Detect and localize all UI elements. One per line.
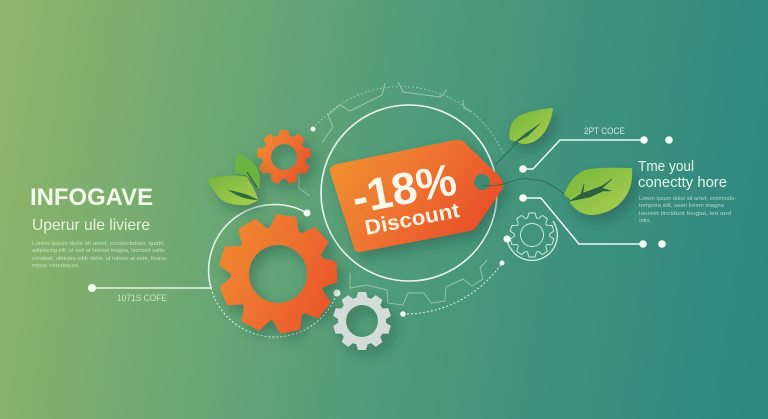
discount tag (330, 140, 570, 252)
tag eyelet (474, 174, 490, 190)
icon: top leaf (495, 108, 553, 165)
body paragraph: Lorem ipsum dolor sit amet, consectetuer, quidit, (32, 241, 165, 247)
right paragraph: odio. (639, 218, 651, 224)
icon: outline gear (503, 213, 557, 260)
body paragraph (32, 241, 168, 269)
left text block (30, 184, 168, 269)
label top: 2PT COCE (584, 126, 625, 136)
title: INFOGAVE (30, 184, 153, 211)
right paragraph: laoreet tincidunt feugiat, leo and (639, 211, 731, 217)
right text block: conectty hore (638, 174, 727, 191)
discount value: -18% (348, 153, 460, 224)
background gear outline and dotted ring (299, 82, 503, 305)
central ring (321, 105, 497, 281)
ring around main gear (209, 126, 340, 337)
discount label: Discount (363, 199, 462, 240)
right connector: top (519, 126, 673, 173)
grey gear (333, 292, 398, 358)
right connector: bottom (519, 194, 666, 248)
body paragraph: mpus consequat. (32, 263, 80, 269)
icon: leaves left (207, 153, 260, 205)
small orange gear (256, 130, 318, 192)
icon: right leaf (564, 168, 632, 215)
subtitle: Uperur ule liviere (32, 217, 150, 234)
left connector with label: 1071S COFE (117, 293, 167, 303)
body paragraph: volutpat, ultricies nibh dolor, ut labore at sem, tourre- (32, 256, 168, 262)
left connector with label (88, 284, 212, 303)
right heading: Tme youl (638, 159, 694, 175)
right paragraph (639, 196, 736, 224)
tag string (482, 179, 570, 198)
right paragraph: Lorem ipsum dolor sit amet, commodo- (639, 196, 736, 202)
right paragraph: tempora elit, sean lorem magna (639, 203, 724, 209)
body paragraph: adipiscing elit, ut sed at laoreet magna, hicmorit saltis (32, 248, 166, 254)
lower dotted arc (400, 260, 504, 317)
right text block (638, 159, 736, 224)
main orange gear (218, 214, 346, 342)
